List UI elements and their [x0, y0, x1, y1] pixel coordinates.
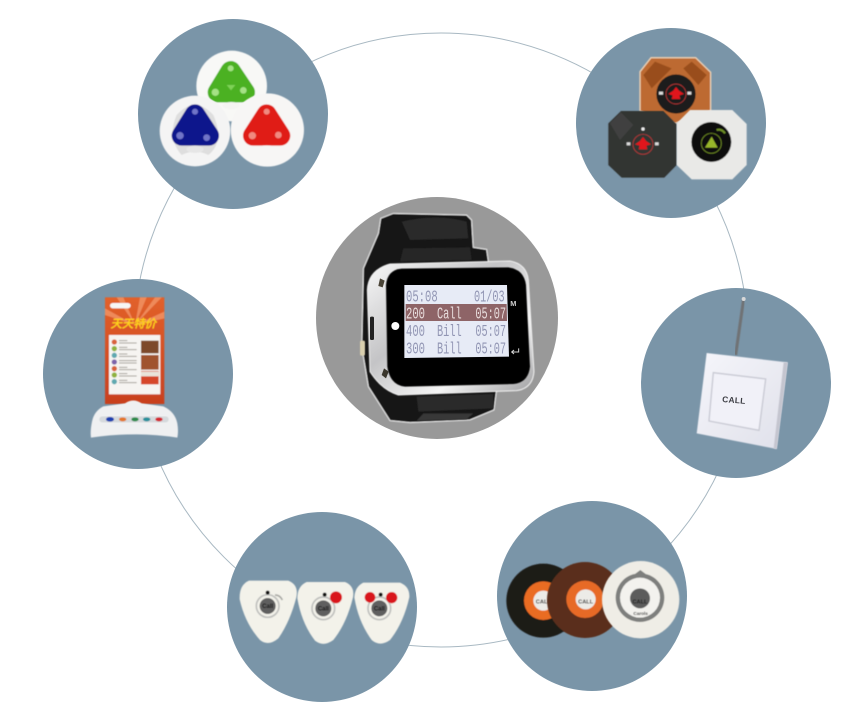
- side details: [360, 278, 389, 378]
- brown round button: [547, 562, 623, 638]
- screen: 300: [406, 340, 425, 359]
- screen: 200: [406, 306, 425, 325]
- screen: Bill: [437, 323, 462, 342]
- panel: wall call switch: [641, 288, 831, 478]
- green button: [196, 51, 267, 121]
- return key icon: [512, 348, 519, 354]
- red button: [231, 93, 304, 167]
- panel: tri-lobe colour buttons: [138, 19, 328, 209]
- button one: [240, 581, 297, 643]
- center grey disc: [316, 197, 558, 439]
- call label: CALL: [722, 394, 746, 406]
- button one: Call: [262, 604, 273, 610]
- black button: [608, 111, 677, 178]
- screen: 400: [406, 323, 425, 342]
- watch black face: [386, 267, 530, 387]
- black round button: CALL: [536, 599, 551, 605]
- brown round button: CALL: [578, 599, 594, 605]
- white round button: [602, 561, 679, 638]
- white button: [677, 110, 747, 179]
- button two: Call: [318, 606, 329, 612]
- panel disc: [497, 501, 687, 691]
- panel disc: [227, 512, 417, 702]
- button three: Call: [374, 606, 385, 612]
- panel: octagonal buttons: [576, 28, 766, 218]
- white round button: CALL: [632, 599, 648, 605]
- button two: [297, 582, 353, 644]
- switch plate: [697, 353, 788, 449]
- white round button: Carols: [633, 611, 648, 616]
- screen: 05:07: [475, 340, 506, 359]
- menu key label: M: [510, 299, 516, 308]
- menu card: [105, 297, 164, 404]
- panel disc: [138, 19, 328, 209]
- wood button: [640, 58, 711, 123]
- screen: 05:07: [475, 306, 506, 325]
- base button strip: [99, 416, 169, 422]
- panel: menu holder stand: [43, 279, 233, 469]
- screen: 05:07: [475, 323, 506, 342]
- center: wrist pager watch: [316, 197, 558, 439]
- menu headline: 天天特价: [111, 317, 158, 330]
- antenna: [736, 299, 744, 355]
- white indicator dot: [391, 322, 399, 330]
- panel: triangular call buttons: [227, 512, 417, 702]
- panel disc: [641, 288, 831, 478]
- screen: Call: [437, 306, 462, 325]
- screen: Bill: [437, 340, 462, 359]
- blue button: [160, 96, 230, 166]
- panel: round call buttons: [497, 501, 687, 691]
- switch button: [709, 373, 766, 430]
- watch strap: [362, 213, 497, 423]
- black round button: [506, 564, 580, 638]
- button three: [354, 583, 409, 644]
- connecting ring: [134, 33, 748, 647]
- panel disc: [576, 28, 766, 218]
- screen: [404, 285, 509, 359]
- screen: 05:08: [406, 288, 438, 307]
- screen: 01/03: [474, 288, 505, 307]
- watch silver body: [367, 261, 534, 395]
- brown round button: Carols: [578, 612, 593, 617]
- panel disc: [43, 279, 233, 469]
- stand base: [91, 400, 178, 438]
